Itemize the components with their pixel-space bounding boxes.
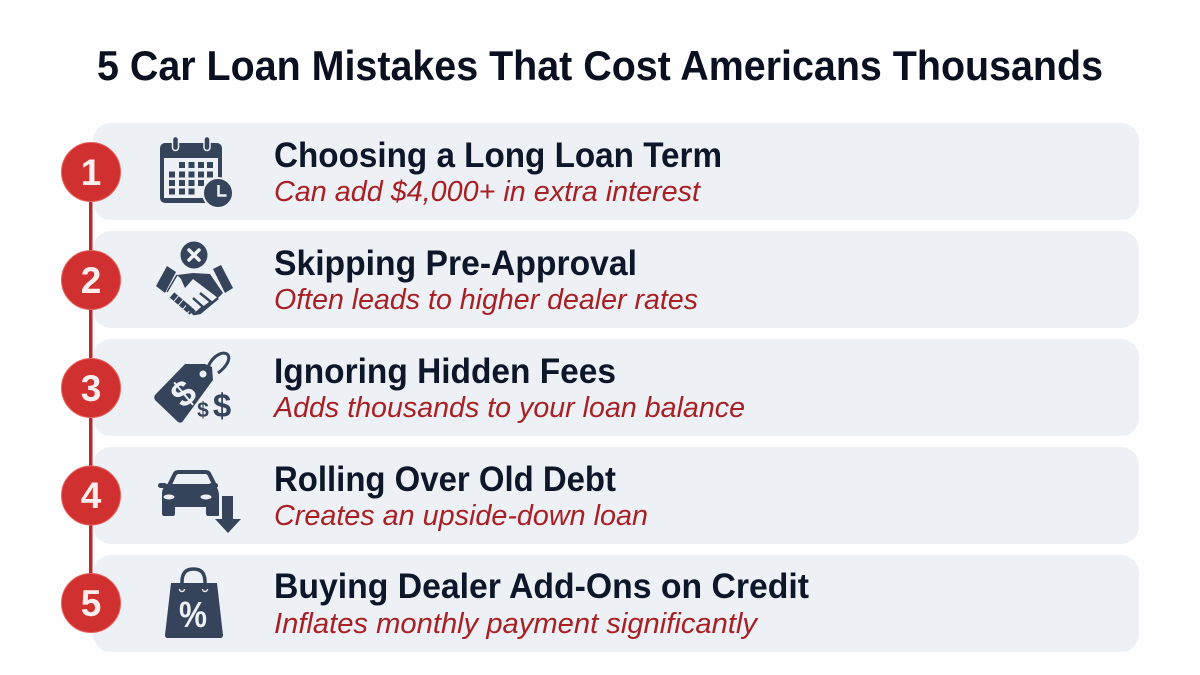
icon: price tag with dollar signs: $ bbox=[162, 371, 204, 416]
subtext: mistake 4: Creates an upside-down loan bbox=[274, 500, 648, 532]
panel: mistake 3 bbox=[93, 339, 1139, 436]
heading: mistake 5: Buying Dealer Add-Ons on Credit bbox=[274, 567, 809, 606]
timeline connector bbox=[89, 172, 92, 603]
number badge 2 bbox=[62, 250, 120, 310]
icon: price tag with dollar signs: $ bbox=[197, 399, 209, 422]
panel: mistake 5 bbox=[93, 555, 1139, 652]
panel: mistake 2 bbox=[93, 231, 1139, 328]
heading: mistake 2: Skipping Pre-Approval bbox=[274, 244, 637, 283]
number badge 4: 4 bbox=[81, 475, 102, 516]
number badge 5: 5 bbox=[81, 583, 101, 624]
icon: shopping bag with percent bbox=[165, 569, 223, 638]
number badge 5 bbox=[62, 574, 120, 632]
panel: mistake 1 bbox=[93, 123, 1139, 220]
subtext: mistake 2: Often leads to higher dealer rates bbox=[274, 284, 698, 316]
icon: calendar with clock bbox=[160, 136, 233, 208]
panel: mistake 4 bbox=[93, 447, 1139, 544]
icon: price tag with dollar signs bbox=[154, 353, 238, 427]
subtext: mistake 5: Inflates monthly payment significantly bbox=[274, 608, 759, 640]
title: 5 Car Loan Mistakes That Cost Americans Thousands bbox=[97, 42, 1103, 89]
heading: mistake 3: Ignoring Hidden Fees bbox=[274, 352, 616, 391]
heading: mistake 4: Rolling Over Old Debt bbox=[274, 460, 616, 499]
number badge 1: 1 bbox=[81, 152, 101, 193]
number badge 1 bbox=[62, 142, 120, 202]
number badge 3: 3 bbox=[81, 368, 101, 409]
icon: price tag with dollar signs: $ bbox=[213, 387, 231, 424]
number badge 4 bbox=[62, 466, 120, 525]
number badge 3 bbox=[62, 358, 120, 418]
subtext: mistake 3: Adds thousands to your loan balance bbox=[272, 392, 745, 424]
number badge 2: 2 bbox=[81, 260, 101, 301]
icon: handshake with x mark bbox=[156, 242, 233, 314]
subtext: mistake 1: Can add $4,000+ in extra interest bbox=[274, 176, 702, 208]
icon: car with down arrow bbox=[158, 470, 241, 533]
heading: mistake 1: Choosing a Long Loan Term bbox=[274, 136, 722, 175]
icon: shopping bag with percent: % bbox=[179, 594, 207, 635]
